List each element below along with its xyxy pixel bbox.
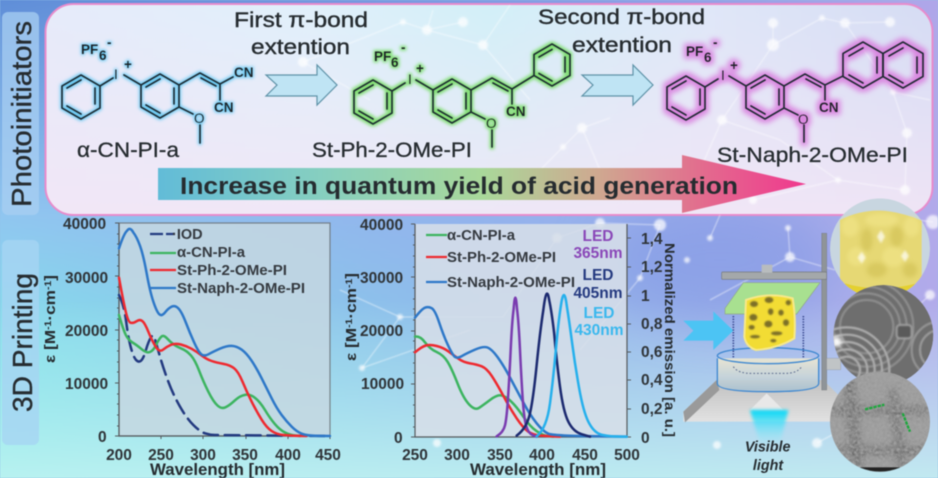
- heading: first π-bond extention: extention: [251, 35, 350, 59]
- curves: [119, 229, 330, 436]
- molecule: St-Ph-2-OMe-PI: -: [401, 40, 406, 55]
- x tick labels: 400: [275, 447, 301, 464]
- LED labels: [573, 228, 624, 339]
- y tick labels: 20000: [65, 323, 108, 340]
- LED labels: LED: [582, 228, 614, 245]
- tab: 3D Printing: 3D Printing: [7, 273, 38, 412]
- legend: [426, 228, 575, 291]
- molecule: St-Ph-2-OMe-PI: O: [486, 116, 497, 131]
- molecule: St-Ph-2-OMe-PI: [354, 40, 570, 147]
- right axis title: Normalized emission [a. u.]: [662, 243, 678, 437]
- left tick labels: 10000: [361, 376, 404, 393]
- x tick labels: 300: [190, 447, 216, 464]
- molecule: α-CN-PI-a: I: [114, 67, 118, 82]
- right tick labels: 0,8: [641, 316, 663, 333]
- left tick labels: 40000: [360, 217, 403, 234]
- y tick labels: 0: [98, 429, 107, 446]
- label: visible light: Visible: [745, 440, 791, 456]
- label: visible light: [745, 440, 791, 474]
- right tick labels: 0: [641, 430, 650, 447]
- y axis title: ε [M: [343, 332, 360, 361]
- molecule: α-CN-PI-a: 6: [99, 48, 107, 63]
- molecule: α-CN-PI-a: -: [107, 35, 112, 50]
- legend: [150, 227, 305, 297]
- label: α-CN-PI-a: α-CN-PI-a: [77, 139, 179, 162]
- y axis title: ]: [343, 273, 360, 279]
- printed scaffold: [744, 295, 795, 350]
- legend: α-CN-PI-a: [177, 245, 246, 261]
- molecule: St-Naph-2-OMe-PI: [667, 35, 923, 142]
- molecule: St-Naph-2-OMe-PI: -: [713, 35, 718, 50]
- heading: second π-bond extention: Second π-bond: [538, 5, 705, 29]
- printer base: [683, 380, 840, 422]
- photo: SEM image: [830, 372, 930, 477]
- molecule: α-CN-PI-a: O: [194, 111, 205, 126]
- heading: second π-bond extention: [538, 5, 705, 57]
- tab: 3D Printing: [2, 240, 39, 445]
- chart: absorption with IOD: [42, 216, 341, 478]
- y axis title: -1: [344, 279, 354, 288]
- molecule: St-Ph-2-OMe-PI: +: [416, 61, 424, 76]
- x tick labels: 200: [106, 447, 132, 464]
- LED labels: LED: [584, 305, 614, 322]
- molecule: St-Naph-2-OMe-PI: O: [798, 112, 809, 127]
- tab: Photoinitiators: Photoinitiators: [6, 21, 37, 207]
- y tick labels: [63, 216, 108, 446]
- molecule: St-Ph-2-OMe-PI: 6: [391, 55, 399, 70]
- x tick labels: [106, 447, 341, 464]
- right tick labels: [641, 231, 663, 447]
- label: St-Naph-2-OMe-PI: St-Naph-2-OMe-PI: [717, 144, 908, 167]
- label: visible light: light: [753, 458, 784, 474]
- right tick labels: 0,2: [641, 401, 663, 418]
- photo: grey layered surface: [804, 280, 938, 413]
- y tick labels: 10000: [65, 376, 108, 393]
- arrow: increase in quantum yield: [158, 155, 806, 213]
- LED labels: 405nm: [573, 285, 623, 302]
- legend: St-Ph-2-OMe-PI: [447, 250, 556, 266]
- build plate: [725, 283, 820, 314]
- LED labels: LED: [582, 267, 614, 284]
- x tick labels: 350: [232, 447, 258, 464]
- right tick labels: 0,4: [641, 372, 663, 389]
- left tick labels: 30000: [360, 270, 403, 287]
- x tick labels: 250: [402, 447, 428, 464]
- x tick labels: 350: [487, 447, 513, 464]
- legend: ·IOD: [172, 227, 203, 243]
- molecule: α-CN-PI-a: CN: [234, 65, 254, 80]
- x tick labels: 300: [444, 447, 470, 464]
- illustration: 3D printer: [683, 198, 938, 477]
- molecule: St-Ph-2-OMe-PI: CN: [506, 104, 526, 119]
- y tick labels: 30000: [65, 270, 108, 287]
- y axis title: -1: [43, 281, 53, 290]
- y axis title: -1: [43, 321, 53, 330]
- legend: St-Ph-2-OMe-PI: [177, 263, 287, 279]
- left tick labels: [360, 217, 404, 447]
- arrow: first extension: [266, 65, 337, 105]
- right tick labels: 1: [641, 288, 650, 305]
- legend: St-Naph-2-OMe-PI: [177, 281, 305, 297]
- panel: photoinitiators: [46, 4, 932, 215]
- light beam: [750, 410, 788, 443]
- arrow: blue light: [683, 311, 733, 350]
- molecule: St-Naph-2-OMe-PI: I: [721, 68, 725, 83]
- molecule: St-Ph-2-OMe-PI: I: [408, 72, 412, 87]
- arrow: increase in quantum yield: Increase in quantum yield of acid generation: [180, 173, 738, 200]
- right tick labels: 1,4: [641, 231, 663, 248]
- label: St-Ph-2-OMe-PI: St-Ph-2-OMe-PI: [312, 139, 472, 162]
- stand: [722, 233, 841, 390]
- molecule: α-CN-PI-a: [62, 35, 254, 143]
- photo: printed yellow object: [830, 198, 930, 303]
- y tick labels: 40000: [63, 216, 106, 233]
- projection lines: [733, 316, 803, 358]
- molecule: α-CN-PI-a: CN: [214, 100, 234, 115]
- heading: first π-bond extention: First π-bond: [234, 8, 368, 32]
- molecule: α-CN-PI-a: +: [124, 57, 132, 72]
- heading: second π-bond extention: extention: [572, 33, 672, 57]
- LED labels: 430nm: [574, 322, 624, 339]
- x tick labels: 250: [148, 447, 174, 464]
- molecule: St-Naph-2-OMe-PI: 6: [704, 50, 712, 65]
- molecule: St-Naph-2-OMe-PI: +: [730, 58, 738, 73]
- heading: first π-bond extention: [234, 8, 368, 59]
- molecule: St-Naph-2-OMe-PI: CN: [819, 100, 838, 115]
- y axis title: ]: [42, 275, 59, 281]
- right tick labels: 0,6: [641, 344, 663, 361]
- molecule: α-CN-PI-a: PF: [81, 42, 98, 57]
- x tick labels: 450: [572, 447, 598, 464]
- x tick labels: 400: [529, 447, 555, 464]
- y axis title: -1: [344, 319, 354, 328]
- molecule: St-Naph-2-OMe-PI: PF: [686, 44, 703, 59]
- arrow: second extension: [582, 65, 653, 105]
- resin vat: [717, 348, 819, 392]
- legend: α-CN-PI-a: [447, 228, 516, 244]
- y axis title: ·cm: [343, 288, 360, 319]
- y axis title: ε [M: [42, 334, 59, 363]
- right tick labels: 1,2: [641, 259, 663, 276]
- molecule: St-Ph-2-OMe-PI: PF: [374, 49, 391, 64]
- x tick labels: 450: [315, 447, 341, 464]
- curves: [415, 294, 627, 437]
- x tick labels: 500: [614, 447, 640, 464]
- left tick labels: 0: [394, 430, 403, 447]
- y axis title: ·cm: [42, 290, 59, 321]
- left tick labels: 20000: [360, 323, 403, 340]
- legend: St-Naph-2-OMe-PI: [447, 275, 575, 291]
- x tick labels: [402, 447, 640, 464]
- chart: absorption and LED emission: [343, 217, 678, 478]
- LED labels: 365nm: [573, 245, 623, 262]
